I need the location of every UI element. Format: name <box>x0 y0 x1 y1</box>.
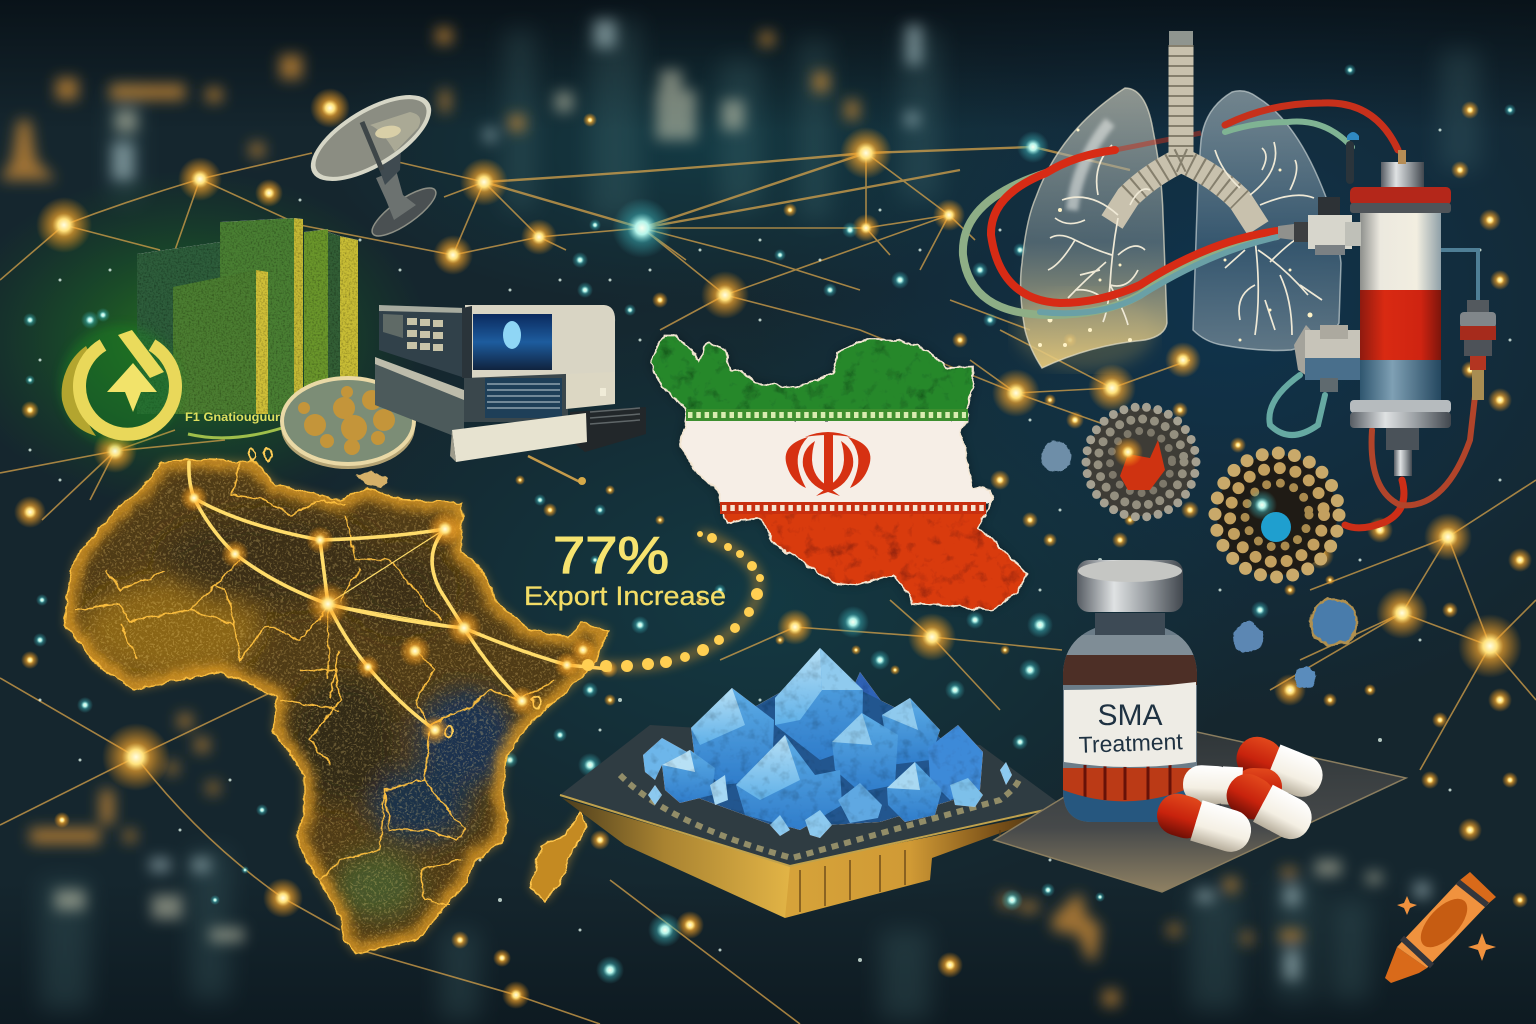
map: Iran flag <box>640 330 1040 617</box>
flag film-strip bands <box>686 409 986 514</box>
green foam building slabs <box>137 218 358 414</box>
Africa land texture <box>50 440 620 970</box>
route nodes <box>180 484 618 745</box>
vial label text: Treatment <box>1078 728 1184 758</box>
pill platform <box>994 732 1406 892</box>
bronchi left <box>1048 142 1322 335</box>
green circular logo with arrow <box>60 325 282 445</box>
upper connector <box>1278 197 1361 255</box>
vial label text: SMA <box>1097 699 1163 732</box>
satellite dish <box>298 78 444 244</box>
green glow behind green materials <box>0 170 430 510</box>
lung sparkles <box>1038 128 1312 347</box>
petri dish <box>281 378 415 469</box>
map: Madagascar <box>530 812 587 902</box>
vial label text <box>1078 699 1184 758</box>
export increase callout <box>524 527 726 611</box>
map: Africa <box>50 440 620 970</box>
blue salt crystals <box>643 648 1012 838</box>
crystal platform <box>560 725 1063 918</box>
export increase callout: 77% <box>553 527 669 585</box>
icon: orange crayon <box>1385 872 1496 983</box>
trade routes <box>189 462 609 730</box>
medicine vial <box>1060 560 1200 825</box>
virus particle: gold spikes with blue core <box>1215 453 1339 577</box>
gold bead dotted trail <box>570 531 764 672</box>
lab analyzer machine <box>375 305 646 485</box>
virus particle: red core <box>1086 407 1196 517</box>
side valve <box>1460 300 1496 400</box>
lungs <box>1015 31 1341 370</box>
bronchi right <box>1215 142 1322 335</box>
trachea <box>1112 31 1258 228</box>
oxygenator column <box>1278 132 1496 476</box>
export increase callout: Export Increase <box>524 581 726 611</box>
faint red tube behind lungs <box>1115 133 1201 150</box>
Iran colour bands <box>640 330 1040 617</box>
country borders <box>65 459 609 954</box>
logo caption text: F1 Gnatiouguur <box>185 410 280 424</box>
capsules <box>1152 731 1329 857</box>
lower connector <box>1294 325 1360 392</box>
small gold islands and rings <box>248 449 540 737</box>
small blue particles <box>1041 442 1357 689</box>
blood tubes <box>963 103 1478 528</box>
tiny star specks <box>28 128 1512 962</box>
Iran emblem <box>786 432 870 496</box>
